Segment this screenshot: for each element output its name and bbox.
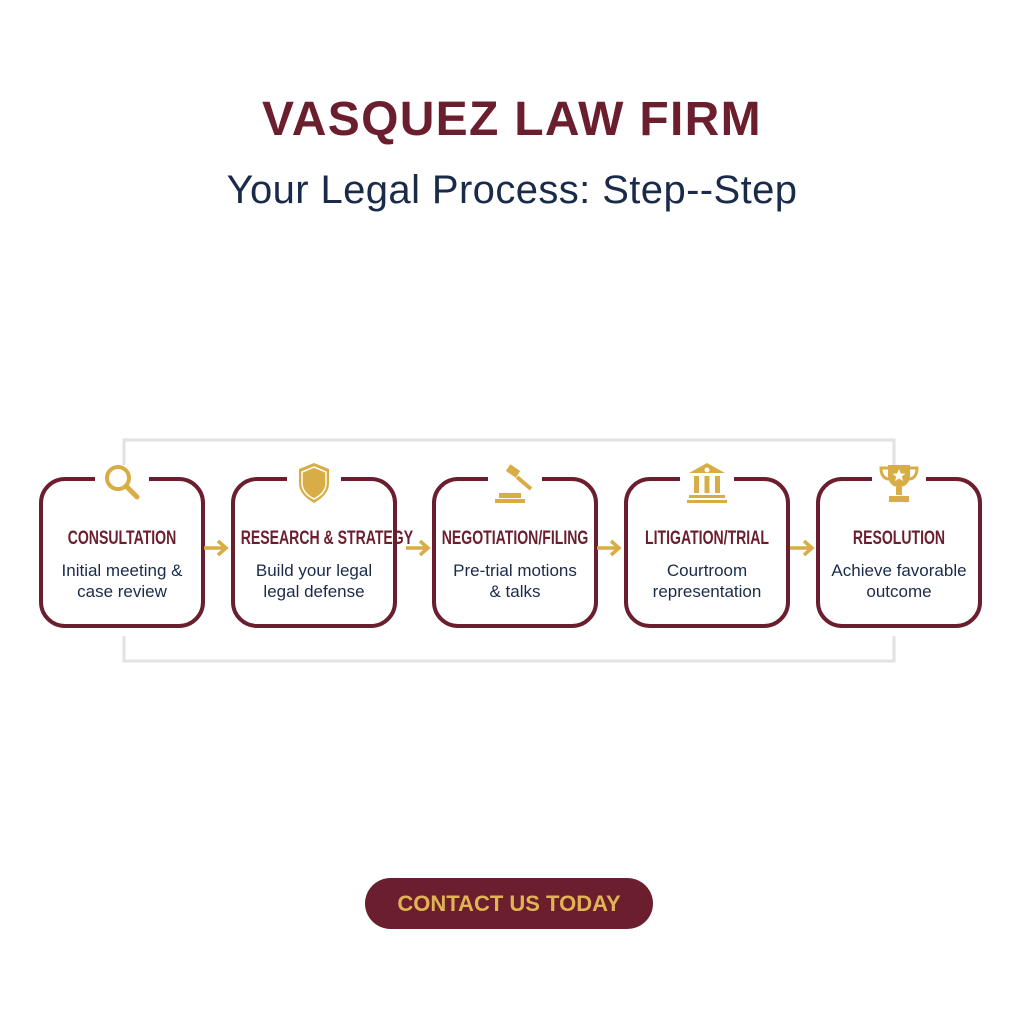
panel: negotiation: Pre-trial motions (453, 561, 577, 580)
panel: research (231, 477, 397, 628)
panel: negotiation: NEGOTIATION/FILING (442, 528, 588, 549)
panel: resolution: outcome (866, 582, 932, 601)
panel: negotiation: & talks (489, 582, 541, 601)
panel: research: Build your legal (256, 561, 372, 580)
panel: resolution: RESOLUTION (853, 528, 945, 549)
subtitle: Your Legal Process: Step--Step (227, 168, 797, 212)
icon: shield (299, 463, 329, 503)
icon: gavel (495, 464, 532, 503)
panel: litigation: LITIGATION/TRIAL (645, 528, 769, 549)
panel: resolution (816, 477, 982, 628)
icon: trophy (880, 465, 918, 502)
arrow 3 (597, 540, 622, 556)
panel: negotiation (432, 477, 598, 628)
arrow 1 (204, 540, 228, 556)
panel: resolution: Achieve favorable (831, 561, 967, 580)
panel: consultation: case review (77, 582, 167, 601)
panel: consultation: CONSULTATION (68, 528, 176, 549)
panel: litigation (624, 477, 790, 628)
button: contact (365, 878, 653, 929)
title: VASQUEZ LAW FIRM (262, 93, 762, 146)
panel: research: legal defense (263, 582, 365, 601)
panel: litigation: representation (653, 582, 761, 601)
panel: consultation: Initial meeting & (62, 561, 182, 580)
icon: magnifier (105, 465, 140, 500)
arrow 4 (790, 540, 814, 556)
button: contact: CONTACT US TODAY (397, 891, 621, 916)
panel: research: RESEARCH & STRATEGY (241, 528, 413, 549)
arrow 2 (406, 540, 430, 556)
icon: courthouse (687, 463, 727, 503)
panel: litigation: Courtroom (667, 561, 747, 580)
panel: consultation (39, 477, 205, 628)
